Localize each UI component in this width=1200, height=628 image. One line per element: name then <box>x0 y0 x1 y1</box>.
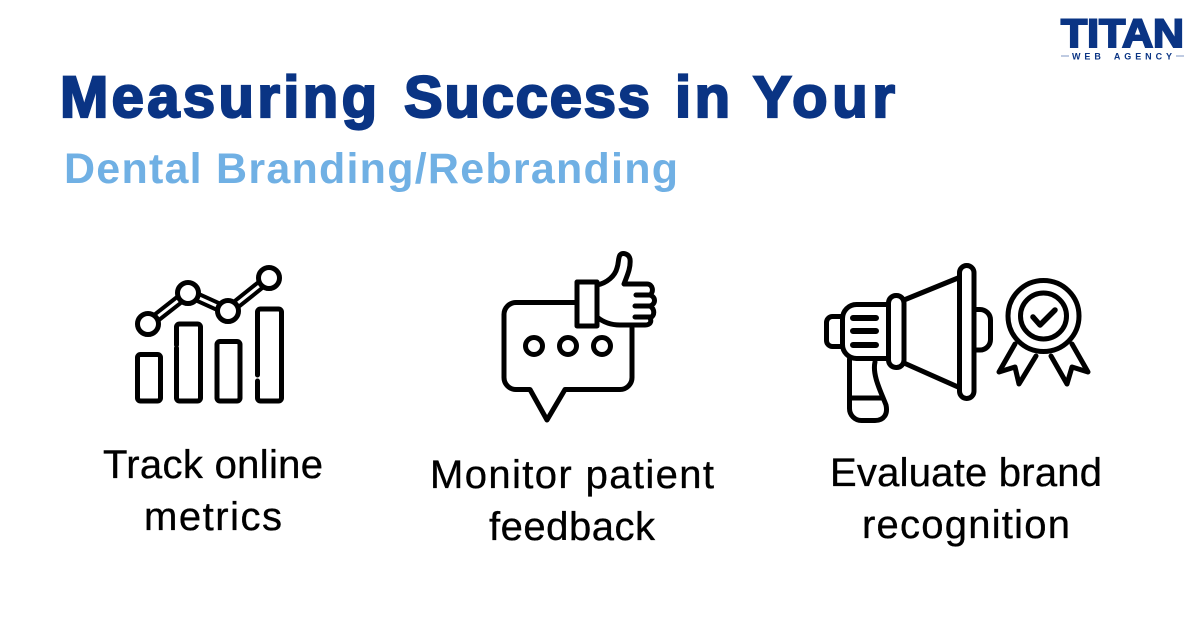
subtitle: Dental Branding/Rebranding <box>64 145 678 193</box>
label: evaluate brand recognition: recognition <box>862 503 1070 547</box>
label: track online metrics: metrics <box>144 495 282 539</box>
label: monitor patient feedback <box>430 453 714 549</box>
icon: megaphone <box>826 266 990 420</box>
title: Measuring <box>60 65 377 130</box>
logo: TITAN <box>1061 12 1184 56</box>
title: Success <box>404 65 650 130</box>
icon: bar chart with trend line <box>138 268 282 401</box>
title: in <box>675 65 730 130</box>
label: evaluate brand recognition: Evaluate brand <box>830 451 1102 495</box>
icon: speech bubble with thumbs up <box>504 254 654 420</box>
title <box>60 65 895 130</box>
title: Your <box>753 65 895 130</box>
logo: WEB AGENCY <box>1072 52 1172 62</box>
label: monitor patient feedback: feedback <box>489 505 656 549</box>
label: track online metrics <box>103 443 323 539</box>
label: evaluate brand recognition <box>830 451 1102 547</box>
label: track online metrics: Track online <box>103 443 323 487</box>
icon: award ribbon with check <box>999 280 1088 384</box>
label: monitor patient feedback: Monitor patient <box>430 453 714 497</box>
